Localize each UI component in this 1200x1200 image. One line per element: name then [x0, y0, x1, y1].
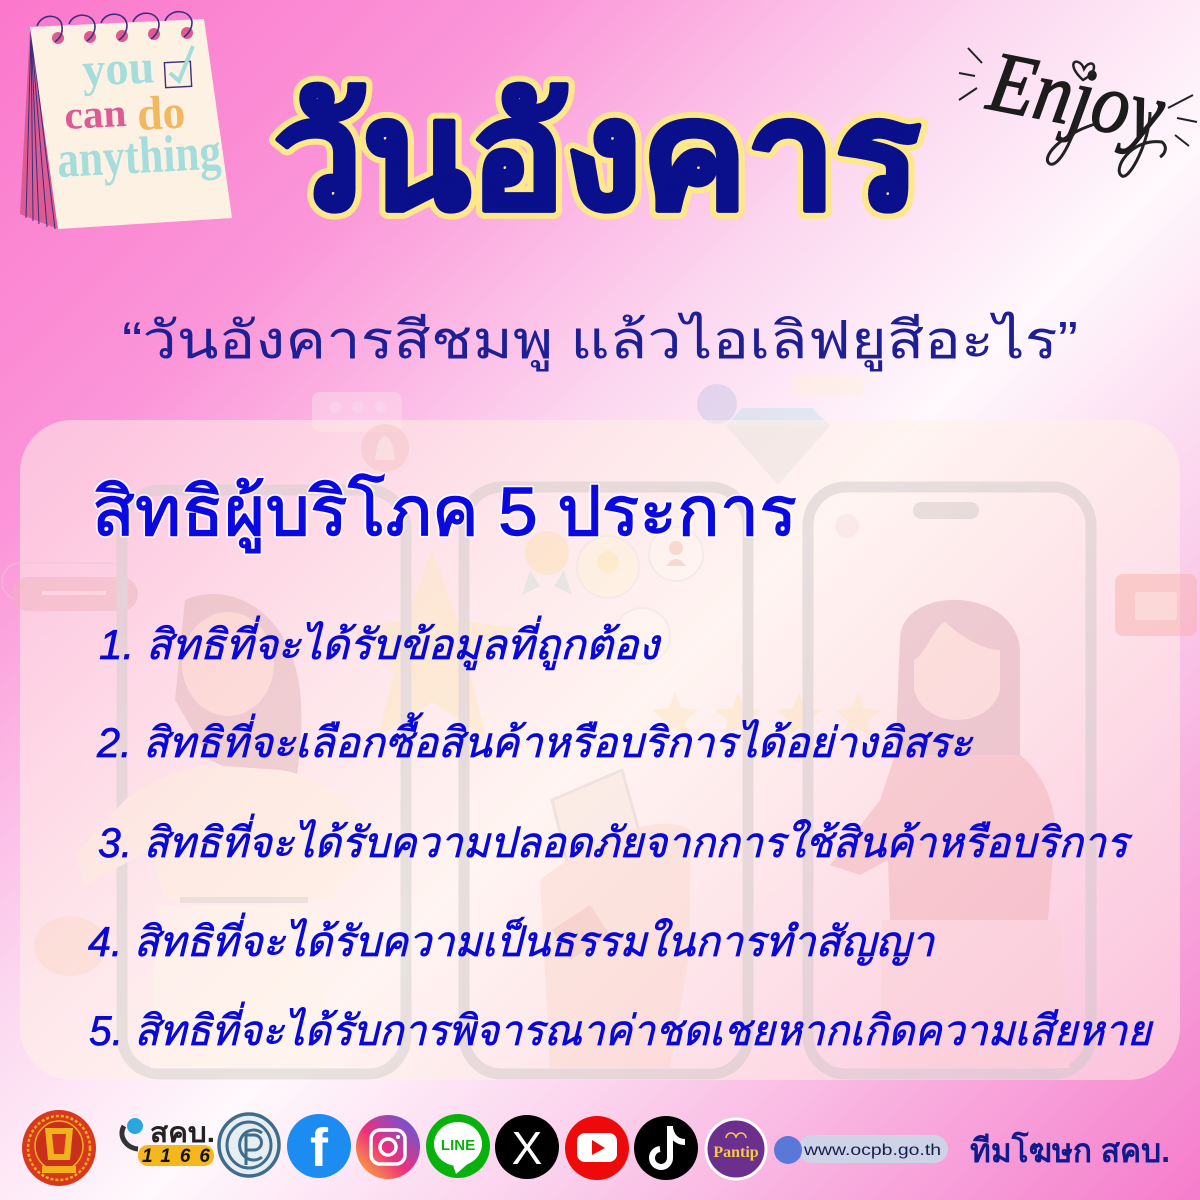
icon: OCPB emblem [219, 1114, 279, 1176]
list heading: สิทธิผู้บริโภค 5 ประการ [92, 473, 797, 553]
icon: line: LINE [441, 1137, 475, 1154]
icon: you can do anything calendar: anything [56, 123, 222, 189]
right 2: 2. สิทธิที่จะเลือกซื้อสินค้าหรือบริการได้อย่างอิสระ [96, 712, 973, 766]
subtitle quote: “วันอังคารสีชมพู แล้วไอเลิฟยูสีอะไร” [122, 311, 1078, 372]
icon: OCPB 1166 hotline: สคบ. [150, 1117, 215, 1148]
phone outlines and figures behind the list [2, 424, 1197, 1074]
right 5: 5. สิทธิที่จะได้รับการพิจารณาค่าชดเชยหากเกิดความเสียหาย [89, 1001, 1153, 1054]
icon: youtube [565, 1116, 629, 1180]
right 3: 3. สิทธิที่จะได้รับความปลอดภัยจากการใช้สินค้าหรือบริการ [98, 813, 1132, 866]
icon: x: X [512, 1122, 542, 1174]
website badge: www.ocpb.go.th [803, 1142, 941, 1159]
background illustration: floating icons above the panel [312, 375, 864, 432]
list of five consumer rights [88, 615, 1153, 1054]
icon: pantip [706, 1119, 766, 1179]
right 4: 4. สิทธิที่จะได้รับความเป็นธรรมในการทำสัญญา [88, 912, 935, 966]
icon: you can do anything calendar [20, 12, 232, 229]
icon: you can do anything calendar: can [63, 90, 127, 138]
icon: facebook [287, 1114, 351, 1178]
content panel [2, 420, 1197, 1080]
icon: pantip: Pantip [713, 1144, 759, 1161]
icon: OCPB 1166 hotline: 1166 [142, 1146, 210, 1167]
right 1: 1. สิทธิที่จะได้รับข้อมูลที่ถูกต้อง [99, 615, 661, 670]
title: วันอังคาร [274, 71, 920, 241]
icon: agency seal [22, 1110, 96, 1186]
icon: line [426, 1114, 490, 1178]
icon: facebook: f [310, 1118, 329, 1178]
footer logo row [22, 1110, 1170, 1186]
icon: you can do anything calendar: you [81, 40, 155, 97]
icon: enjoy lettering: Enjoy [980, 32, 1173, 160]
icon: OCPB 1166 hotline [122, 1117, 215, 1167]
icon: x [495, 1115, 559, 1179]
website badge [774, 1135, 948, 1164]
icon: tiktok [634, 1116, 698, 1180]
list heading: สิทธิผู้บริโภค 5 ประการ [92, 473, 797, 553]
team credit: ทีมโฆษก สคบ. [970, 1131, 1170, 1169]
icon: you can do anything calendar: do [136, 86, 187, 141]
title: วันอังคาร [274, 71, 920, 241]
